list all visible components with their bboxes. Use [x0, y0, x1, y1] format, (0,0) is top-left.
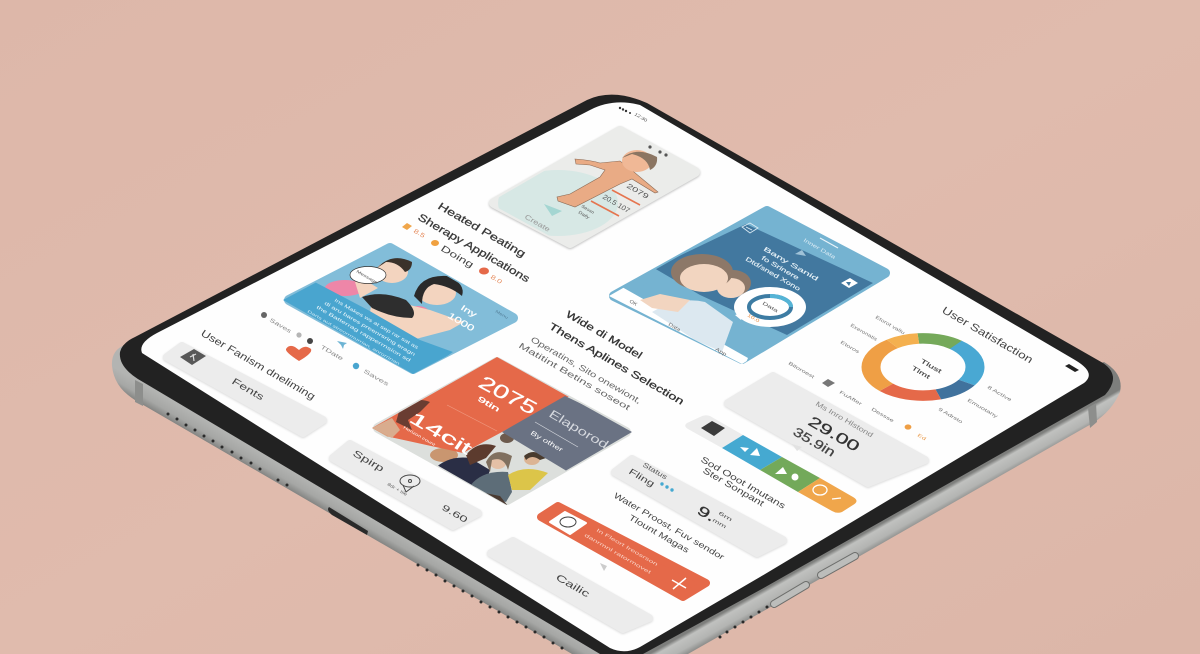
- panel: blue illustration card left: Message: [355, 269, 380, 285]
- card header: Inner Data: [802, 238, 837, 261]
- strip segment: orange: [798, 478, 856, 513]
- person gray top: [470, 472, 512, 502]
- icon: heart: [286, 346, 311, 361]
- heading: wide model: Wide di Model: [563, 309, 644, 361]
- icon: green glyphs: [775, 467, 798, 480]
- chart labels: [787, 315, 1013, 442]
- second person: [376, 261, 408, 283]
- teal triangle: [544, 204, 562, 216]
- panel: spirp: 8dr + tile: [386, 482, 409, 497]
- gray label: [529, 408, 611, 454]
- pointer: [600, 563, 607, 571]
- icon: menu: [742, 223, 758, 233]
- legend: ratings: [402, 223, 503, 286]
- photo corner skin: [372, 418, 400, 438]
- teal circle: [498, 170, 618, 236]
- second figure: [731, 270, 751, 294]
- white stats: 1000: [446, 310, 477, 333]
- alert copy: In Fleort Ireosrson: [595, 528, 659, 568]
- gray label: By other: [529, 430, 565, 454]
- status bar: 12:30: [633, 112, 649, 123]
- progress bubble: [734, 287, 806, 327]
- panel: spirp: [333, 444, 478, 526]
- pointer: [792, 444, 802, 451]
- panel: fents: [167, 346, 323, 433]
- panel: big metric: 35.9in: [790, 425, 838, 459]
- body copy: di aru bares preenrsring eragn: [323, 301, 416, 358]
- heading: user satisfaction: User Satisfaction: [939, 305, 1035, 366]
- clothes: [652, 300, 733, 352]
- chart labels: Ed: [916, 433, 927, 442]
- panel: cailic: Cailic: [553, 573, 591, 600]
- panel: status: Status: [641, 461, 669, 481]
- panel: spirp: Spirp: [350, 449, 386, 474]
- icon strip: [685, 415, 856, 513]
- antenna bands: [135, 380, 1097, 428]
- strip segment: gray: [685, 415, 743, 448]
- panel: blue illustration card left: [280, 248, 513, 380]
- silver body left side: [112, 345, 640, 654]
- strip segment: blue: [722, 435, 782, 470]
- heading: therapy applications: Heated Peating: [435, 201, 527, 260]
- heading: wide model: [546, 309, 686, 407]
- hair on orange: [396, 400, 430, 430]
- card copy: Dtd/sned Xono: [744, 256, 802, 293]
- device dots: [648, 145, 668, 157]
- menu label: Menu: [494, 309, 510, 320]
- body copy: the Batterrag rapperrnsion sd: [315, 305, 412, 364]
- white stats: [446, 303, 480, 333]
- icon: pin: [400, 475, 420, 492]
- donut chart: Tlust: [919, 358, 943, 375]
- pink shirt: [325, 280, 359, 296]
- legend: saves: Saves: [268, 317, 292, 335]
- speech bubble: [350, 266, 386, 284]
- card copy: fo Srinere: [760, 255, 800, 282]
- icon: orange glyphs: [813, 485, 841, 499]
- alert copy: [583, 528, 659, 576]
- panel: status: 6m: [717, 511, 734, 523]
- alert copy: danrmnl ratormovet: [583, 533, 653, 576]
- card numbers: 2075: [474, 372, 541, 419]
- gray block: [502, 396, 640, 473]
- photo: [371, 423, 548, 506]
- card header: [802, 238, 838, 261]
- panel: big metric: [728, 376, 925, 483]
- silver body right side: [620, 362, 1121, 654]
- panel: status: Fling: [627, 466, 657, 489]
- create label: Create: [523, 213, 552, 234]
- chart labels: Emuotany: [966, 398, 999, 420]
- card copy: [744, 246, 820, 293]
- panel: big metric: 29.00: [805, 414, 862, 455]
- body copy: Ins Makes ws at sep rar sat as: [333, 298, 420, 351]
- chart labels: Dessse: [870, 407, 895, 424]
- panel: cailic: [491, 541, 649, 629]
- woman head: [671, 254, 733, 290]
- legend: ratings: Doing: [438, 244, 475, 270]
- heading: user function: User Fanism dneliming: [198, 328, 317, 402]
- white screen: [141, 102, 1089, 651]
- metric text: 2079: [625, 182, 650, 201]
- strip segment: green: [760, 457, 820, 492]
- panel: therapy phone card: [494, 131, 695, 243]
- black bezel: [120, 95, 1113, 654]
- footer tabs: Data: [667, 322, 681, 333]
- chart labels: Etoros: [839, 340, 861, 355]
- icon: camera: [701, 421, 725, 436]
- charging slot: [328, 507, 368, 535]
- chart labels: FuAfter: [838, 390, 863, 407]
- chart labels: 9 Adrsto: [937, 407, 964, 425]
- text block: water proof: Water Proost, Fuv sendor: [612, 491, 726, 562]
- text block: model summary: [517, 335, 643, 412]
- donut chart: [871, 338, 975, 396]
- card copy: Bany Sanid: [762, 246, 820, 283]
- orange rule: [447, 405, 497, 431]
- gray label: Elaporod: [546, 408, 611, 451]
- body copy: Darts aut streorrmurrian, anrorrinan: [306, 309, 402, 366]
- person back: [500, 433, 514, 443]
- icon: play tile: [841, 278, 858, 288]
- card numbers: 9tin: [476, 395, 501, 414]
- icon: app tile: [180, 349, 206, 365]
- speaker dots lower: [416, 564, 564, 650]
- legend: ratings: 8.0: [489, 274, 503, 286]
- legend: ratings: 8.5: [412, 228, 426, 240]
- panel: fents: Fents: [229, 377, 266, 403]
- heading: wide model: Thens Aplines Selection: [546, 321, 686, 407]
- side button lower: [774, 585, 806, 604]
- red rules: [591, 190, 640, 216]
- panel: spirp: 9.60: [440, 502, 470, 525]
- person yellow top: [508, 469, 548, 490]
- main person: [370, 305, 464, 338]
- body copy: [306, 298, 420, 366]
- text block: model summary: Operatins, Sito onewiont,: [529, 335, 643, 406]
- metric text: Daily: [577, 210, 591, 220]
- panel: status: [615, 459, 783, 553]
- legend: saves: [261, 312, 390, 388]
- figure: [557, 150, 658, 207]
- panel: status: mm: [711, 518, 728, 530]
- panel: blue illustration card right: [600, 211, 885, 372]
- metric text: 20.5 107: [601, 193, 632, 215]
- chart labels: Exeronatis: [849, 323, 879, 343]
- legend: saves: TDate: [319, 344, 345, 362]
- metric text: Sessn: [580, 204, 596, 215]
- triangle marker: [795, 250, 806, 256]
- panel: alert bar: [541, 506, 706, 597]
- dark blue lower band: [283, 282, 453, 374]
- speaker dots left: [166, 412, 288, 486]
- donut chart: Tlmt: [910, 365, 931, 381]
- icon: triangles: [740, 447, 760, 456]
- footer tabs: [628, 299, 728, 358]
- white footer: [609, 288, 748, 364]
- text block: model summary: Matitint Betins soseot: [517, 341, 633, 412]
- progress bubble: 10.0: [746, 313, 761, 324]
- status notch right: [1065, 364, 1079, 372]
- text block: strip support: Sod Ooot Imutans: [699, 454, 788, 511]
- heading: therapy applications: [415, 201, 532, 285]
- heading: therapy applications: Sherapy Applications: [415, 212, 532, 285]
- panel: status: 9.: [694, 503, 718, 525]
- person dark dress: [438, 458, 490, 488]
- metric text: [577, 182, 650, 220]
- icon: chat tile: [550, 512, 586, 534]
- footer tabs: App: [714, 347, 728, 358]
- orange block: [372, 352, 570, 453]
- speaker dots right: [718, 606, 768, 638]
- legend icons: [822, 379, 911, 430]
- card numbers: 14cit: [406, 408, 477, 459]
- side button upper: [821, 556, 855, 575]
- panel: photo stats card: [371, 352, 640, 506]
- card numbers: Horizon count: [402, 425, 437, 447]
- panel: big metric: Ms Inro Hlstond: [814, 400, 875, 439]
- chart labels: Etorot valtu: [874, 315, 906, 336]
- phone device: [112, 95, 1121, 654]
- chart labels: 8 ActIve: [986, 385, 1013, 403]
- card numbers: [402, 372, 541, 459]
- footer tabs: OK: [628, 299, 639, 308]
- text block: strip support: Ster Sonpant: [701, 465, 767, 508]
- status bar: [619, 107, 649, 123]
- white stats: Iny: [459, 303, 480, 320]
- icon: close: [672, 578, 686, 589]
- arm: [640, 294, 690, 312]
- legend: saves: Saves: [362, 368, 390, 388]
- chart labels: Bitoroest: [787, 361, 816, 380]
- text block: water proof: Tlount Magas: [627, 513, 692, 555]
- dark blue field: [654, 224, 873, 335]
- progress bubble: Data: [761, 301, 779, 314]
